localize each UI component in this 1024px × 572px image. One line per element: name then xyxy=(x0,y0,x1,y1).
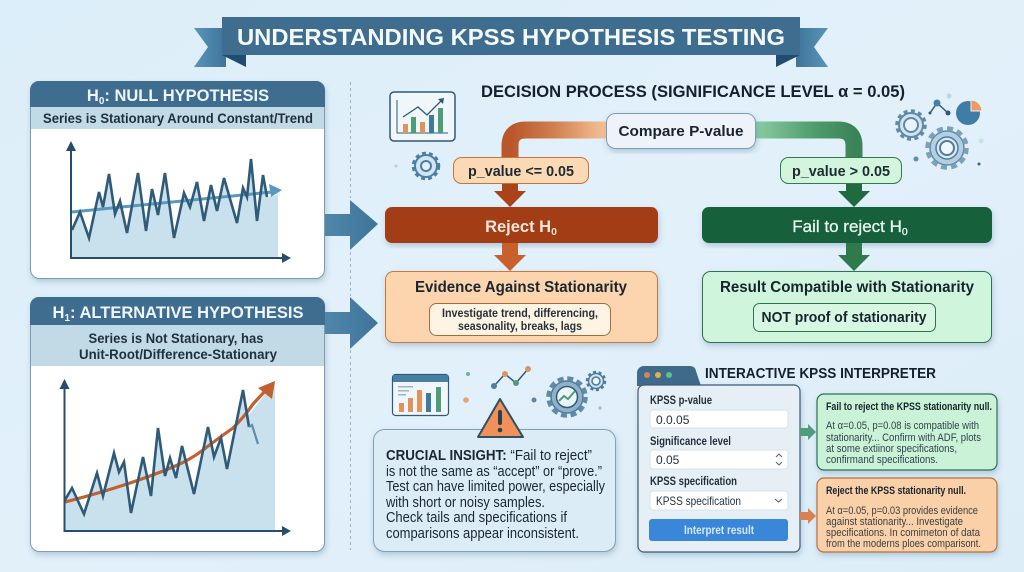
fail to reject decision bar: 0 xyxy=(902,226,908,238)
fail to reject decision bar xyxy=(702,207,992,243)
reject decision bar: 0 xyxy=(551,226,557,238)
fail result details: stationarity... Confirm with ADF, plots xyxy=(826,432,981,444)
insight text: Test can have limited power, especially xyxy=(386,479,606,495)
panel: null hypothesis xyxy=(30,81,325,278)
icon: gears with trend xyxy=(548,372,605,416)
field: significance level: Significance level xyxy=(650,434,731,448)
evidence against stationarity box xyxy=(386,272,658,342)
icon: network nodes xyxy=(928,100,950,116)
fail to reject decision bar: Fail to reject H xyxy=(792,217,902,236)
icon: warning triangle xyxy=(478,399,523,437)
result compatible box: Result Compatible with Stationarity xyxy=(720,279,974,296)
reject result details: against stationarity... Investigate xyxy=(826,516,963,528)
fail branch condition: p_value > 0.05 xyxy=(792,163,890,180)
arrow: fail to result xyxy=(838,243,870,271)
evidence guidance: seasonality, breaks, lags xyxy=(458,319,582,333)
heading: alternative hypothesis: 1 xyxy=(64,313,70,324)
insight text: is not the same as “accept” or “prove.” xyxy=(386,464,602,480)
result card: fail to reject xyxy=(817,394,997,470)
interpret button xyxy=(649,519,788,541)
insight text: CRUCIAL INSIGHT: “Fail to reject” xyxy=(386,448,592,464)
not proof note xyxy=(754,304,936,332)
alternative hypothesis description: Unit-Root/Difference-Stationary xyxy=(79,347,277,362)
icon: medium gear xyxy=(897,111,925,139)
arrow: reject to evidence xyxy=(494,243,526,271)
fail result details xyxy=(826,420,981,466)
arrow: condition to fail xyxy=(838,184,870,207)
alternative hypothesis description xyxy=(79,331,277,362)
connector: compare to fail branch xyxy=(752,130,854,160)
result card: reject xyxy=(817,478,997,552)
arrow: condition to reject xyxy=(494,184,526,207)
heading: null hypothesis: H xyxy=(87,87,99,105)
arrow: null hypothesis to reject xyxy=(325,200,378,250)
field: p-value xyxy=(650,393,788,428)
icon: pie chart xyxy=(956,100,982,125)
icon: chart xyxy=(390,92,455,141)
null hypothesis description: Series is Stationary Around Constant/Trend xyxy=(43,110,313,126)
insight text: with short or noisy samples. xyxy=(385,495,545,511)
heading: alternative hypothesis: H xyxy=(53,304,64,322)
reject branch condition: p_value <= 0.05 xyxy=(468,163,574,180)
crucial insight callout xyxy=(374,430,616,552)
alternative hypothesis description: Series is Not Stationary, has xyxy=(88,331,264,346)
insight text: Check tails and specifications if xyxy=(386,510,568,526)
interpret button: Interpret result xyxy=(684,523,754,537)
decision heading: DECISION PROCESS (SIGNIFICANCE LEVEL α = 0.05) xyxy=(481,83,905,101)
heading: alternative hypothesis: : ALTERNATIVE HYPOTHESIS xyxy=(70,304,303,322)
heading: null hypothesis: : NULL HYPOTHESIS xyxy=(104,87,269,105)
insight text xyxy=(385,448,606,542)
not proof note: NOT proof of stationarity xyxy=(762,309,927,326)
icon: line trend nodes xyxy=(491,366,531,389)
connector: compare to reject branch xyxy=(510,130,610,160)
interpreter form window xyxy=(637,366,800,552)
arrow: to fail result xyxy=(800,424,816,440)
field: significance level xyxy=(650,434,788,469)
field: significance level: 0.05 xyxy=(656,453,680,467)
fail result details: confirmand specifications. xyxy=(826,454,938,466)
icon: small gear xyxy=(413,153,439,179)
field: specification: KPSS specification xyxy=(656,494,741,508)
icon cluster: gears and charts xyxy=(897,94,984,168)
title banner xyxy=(194,17,828,67)
arrow: to reject result xyxy=(800,508,816,524)
evidence guidance xyxy=(430,304,610,336)
reject decision bar xyxy=(385,207,658,243)
reject result details xyxy=(826,505,981,550)
compare p-value box: Compare P-value xyxy=(618,123,744,140)
reject branch condition xyxy=(454,158,588,184)
interactive heading: INTERACTIVE KPSS INTERPRETER xyxy=(705,366,936,382)
field: p-value: KPSS p-value xyxy=(650,393,712,407)
icon: large gear xyxy=(928,128,966,168)
reject decision bar: Reject H xyxy=(485,218,551,236)
evidence against stationarity box: Evidence Against Stationarity xyxy=(415,279,627,296)
insight text: comparisons appear inconsistent. xyxy=(386,526,579,542)
icon: dashboard window xyxy=(392,374,448,416)
chart: stationary series xyxy=(66,141,291,263)
field: p-value: 0.0.05 xyxy=(656,413,690,427)
fail result details: At α=0.05, p=0.08 is compatible with xyxy=(826,420,979,432)
result card: reject: Reject the KPSS stationarity null. xyxy=(826,485,966,497)
reject result details: At α=0.05, p=0.03 provides evidence xyxy=(826,505,978,517)
field: specification: KPSS specification xyxy=(650,474,737,488)
window dots xyxy=(644,372,672,378)
arrow: alternative hypothesis to evidence xyxy=(325,297,378,349)
reject result details: specifications. In comimeton of data xyxy=(826,527,981,539)
fail branch condition xyxy=(780,158,902,184)
fail result details: at some extiinor specifications, xyxy=(826,443,957,455)
evidence guidance: Investigate trend, differencing, xyxy=(442,306,598,320)
title: UNDERSTANDING KPSS HYPOTHESIS TESTING xyxy=(237,24,785,50)
field: specification xyxy=(650,474,788,510)
heading: null hypothesis: 0 xyxy=(99,96,105,107)
chart: non-stationary series xyxy=(60,379,291,536)
compare p-value box xyxy=(606,114,756,148)
reject result details: from the moderns ploes comparisont. xyxy=(826,538,981,550)
result compatible box xyxy=(702,272,992,342)
panel: alternative hypothesis xyxy=(30,297,325,552)
